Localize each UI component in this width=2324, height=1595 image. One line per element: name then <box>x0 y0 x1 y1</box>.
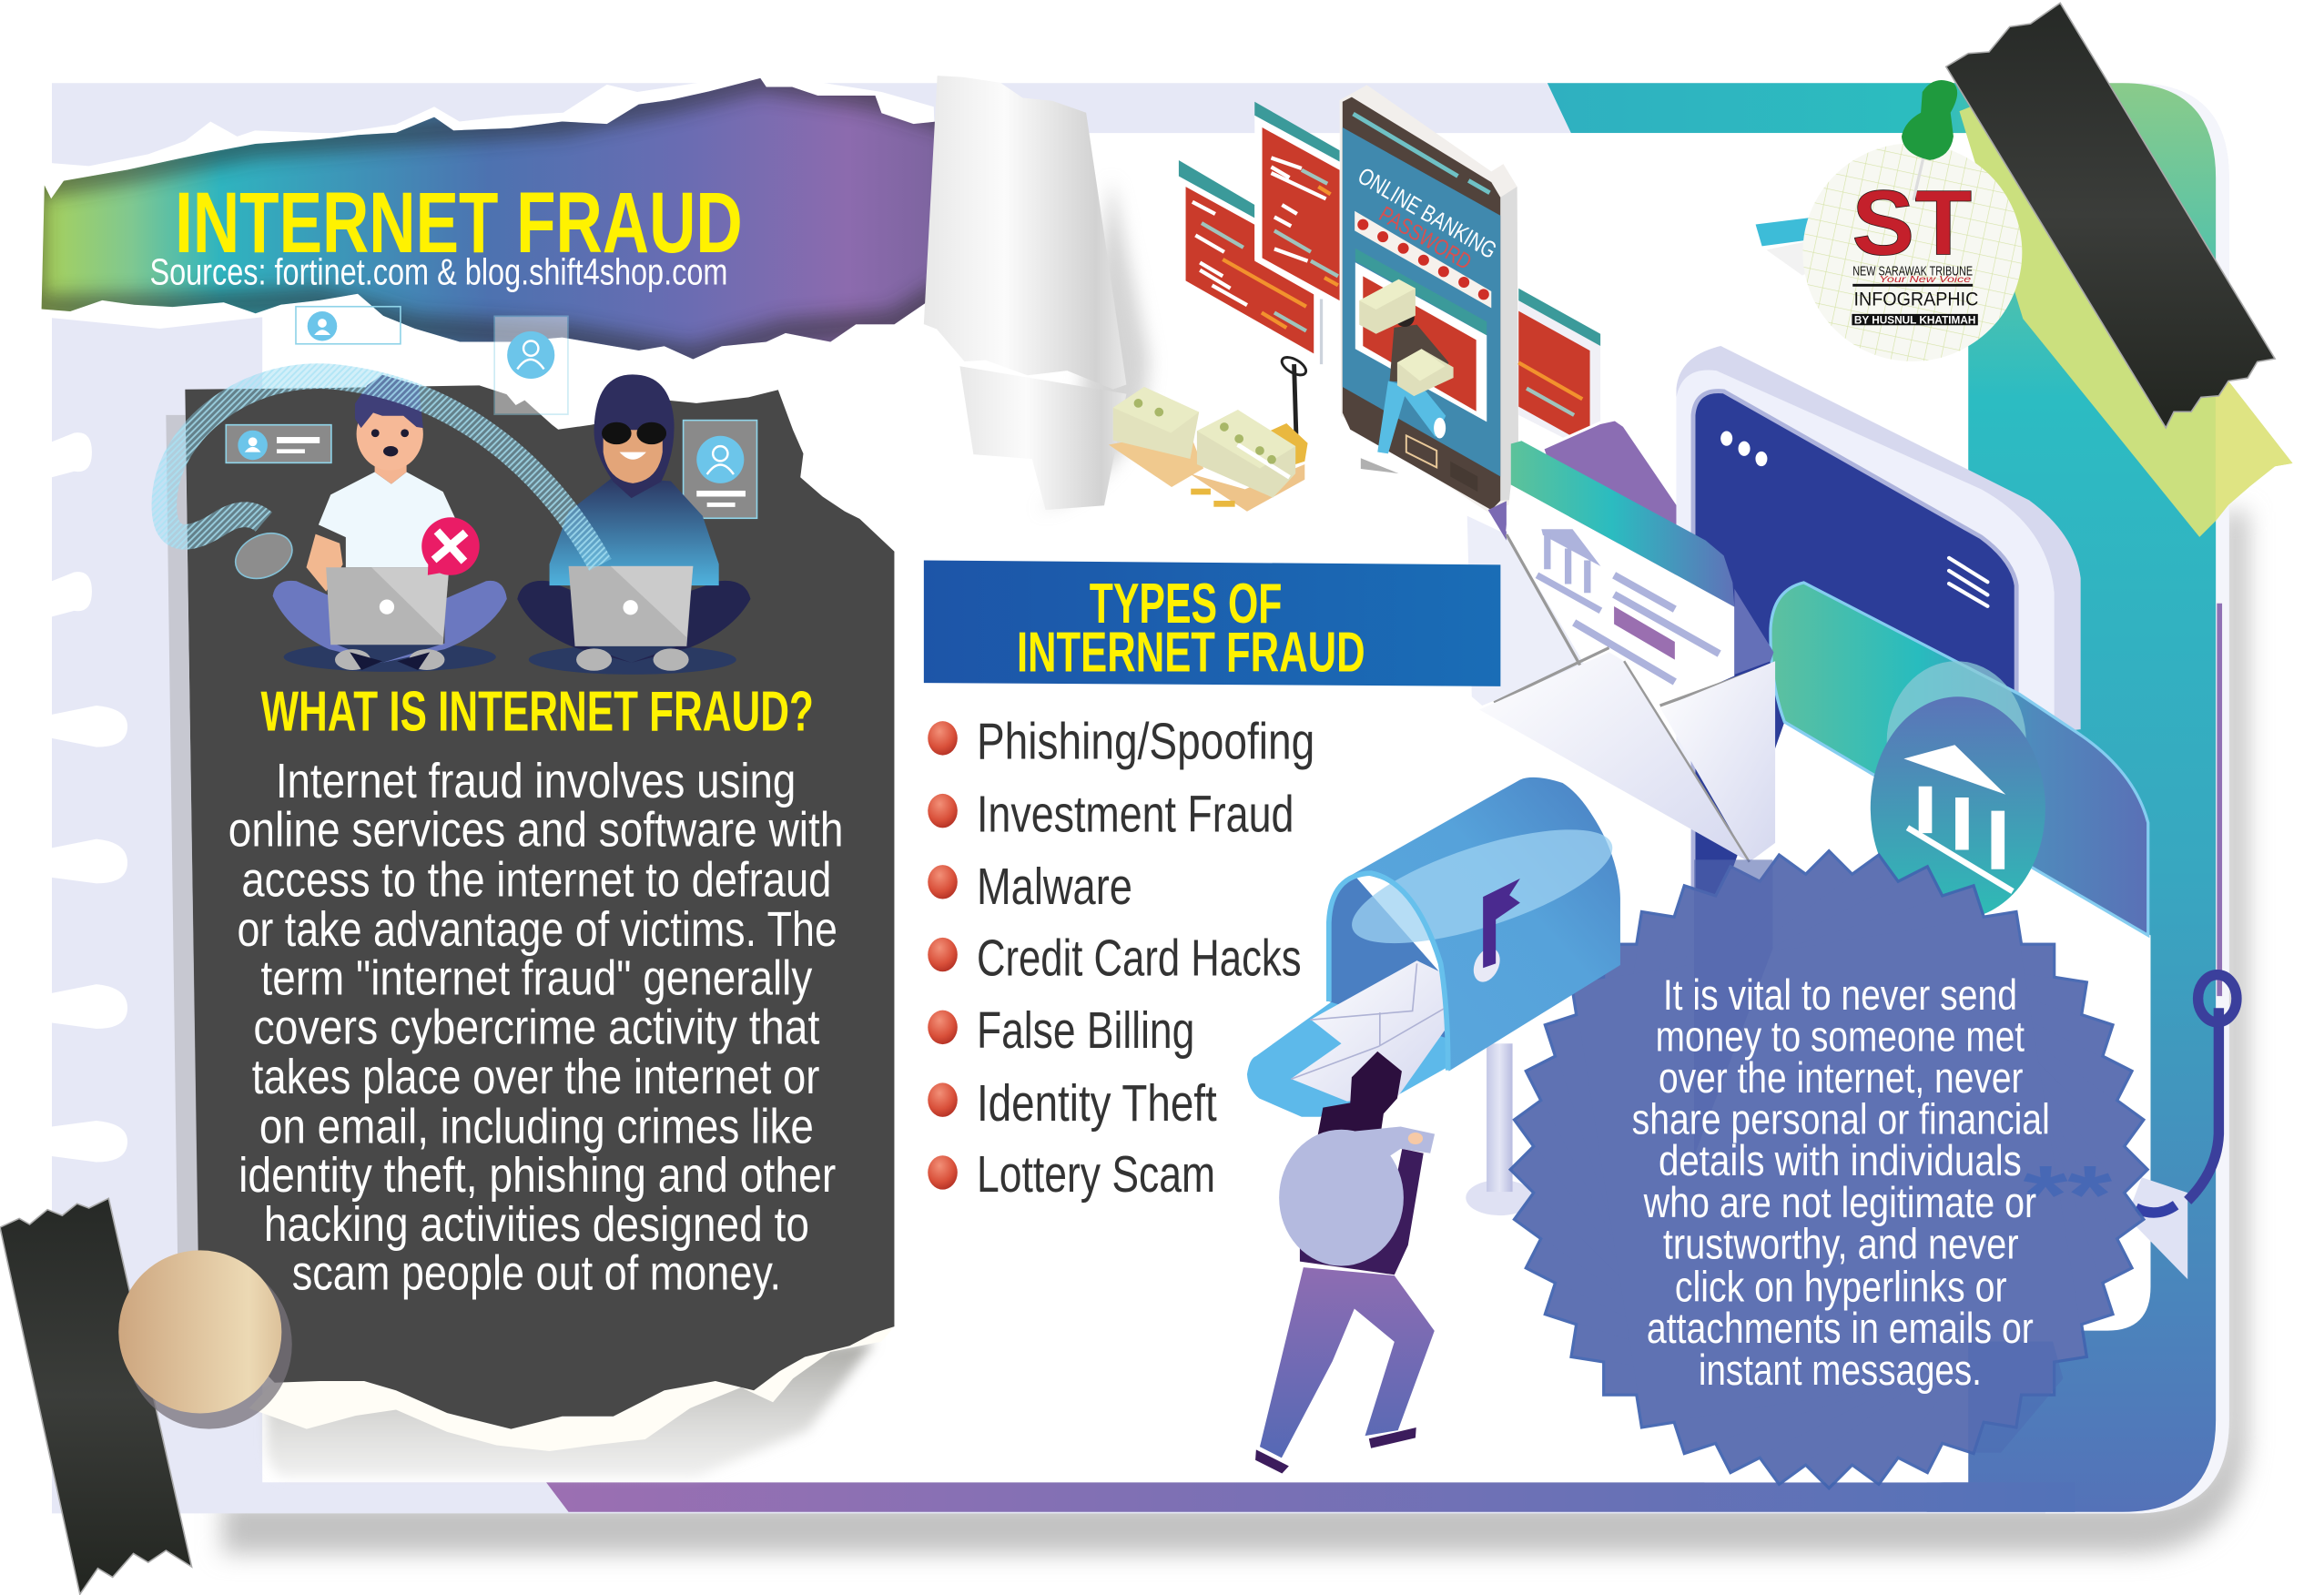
starburst callout: over the internet, never <box>1659 1054 2023 1102</box>
list item: Lottery Scam <box>977 1145 1215 1204</box>
logo sticker: Your New Voice <box>1879 275 1972 285</box>
icon: profile card tall <box>494 316 568 414</box>
big phone <box>1676 346 2081 949</box>
body paragraph: scam people out of money. <box>292 1246 781 1301</box>
fishing hook <box>2126 975 2237 1279</box>
torn banner white edge <box>51 74 939 378</box>
list item: False Billing <box>977 1001 1194 1060</box>
body paragraph: hacking activities designed to <box>264 1197 809 1252</box>
starburst callout: instant messages. <box>1699 1346 1982 1395</box>
body paragraph: identity theft, phishing and other <box>238 1148 836 1203</box>
body paragraph: online services and software with <box>228 803 843 858</box>
online banking phone <box>1340 85 1518 514</box>
list item <box>928 929 1302 987</box>
list: types of fraud <box>928 713 1314 1204</box>
icon: red x bubble <box>421 517 480 575</box>
red code window middle <box>1254 102 1340 364</box>
starburst callout <box>1508 848 2149 1490</box>
starburst callout: attachments in emails or <box>1647 1305 2034 1353</box>
online banking phone: PASSWORD <box>1375 202 1476 275</box>
body paragraph: on email, including crimes like <box>259 1099 814 1153</box>
green bank card <box>1771 583 2148 935</box>
list item: Identity Theft <box>977 1074 1217 1133</box>
heading: what is internet fraud: WHAT IS INTERNET FRAUD? <box>261 681 814 744</box>
red code window right <box>1518 289 1600 457</box>
list item <box>928 1074 1217 1133</box>
logo sticker: INFOGRAPHIC <box>1854 289 1978 310</box>
online banking phone: ONLINE BANKING <box>1354 162 1501 264</box>
list item <box>928 858 1132 916</box>
thief with sack <box>1255 1051 1435 1473</box>
starburst callout: money to someone met <box>1656 1012 2025 1061</box>
logo sticker <box>1756 143 2022 361</box>
rolled paper curl <box>924 76 1149 512</box>
money pallets and pallet jack <box>1109 354 1309 512</box>
logo sticker: BY HUSNUL KHATIMAH <box>1854 313 1975 326</box>
blue banner <box>924 560 1500 686</box>
purple line on right edge <box>2217 604 2221 996</box>
body paragraph: term "internet fraud" generally <box>261 951 812 1006</box>
left punch holes <box>52 432 127 1163</box>
folder purple tab <box>1543 420 1774 676</box>
list item: Investment Fraud <box>977 785 1294 843</box>
icon: profile card left <box>226 425 331 462</box>
top-right lime tape <box>1959 74 2292 537</box>
icon: green push pin <box>1902 80 1957 200</box>
starburst callout: who are not legitimate or <box>1643 1179 2036 1227</box>
body paragraph: takes place over the internet or <box>252 1050 819 1104</box>
page shadow under torn panel <box>267 1342 875 1477</box>
paper sheet shadow <box>222 512 2247 1553</box>
list item <box>928 1001 1194 1060</box>
icon: profile card top left <box>296 307 401 344</box>
panel left shadow <box>166 415 198 1275</box>
dark torn panel <box>185 385 894 1451</box>
list item: Phishing/Spoofing <box>977 713 1314 771</box>
list item <box>928 1145 1215 1204</box>
top-right black tape <box>1946 3 2275 428</box>
starburst callout: ** <box>2023 1148 2113 1241</box>
body paragraph: Internet fraud involves using <box>276 754 796 808</box>
mailbox post <box>1466 1043 1534 1215</box>
bottom-left black tape <box>0 1198 192 1594</box>
hacker illustration <box>517 374 751 675</box>
blue banner: INTERNET FRAUD <box>1017 622 1365 685</box>
list item: Malware <box>977 858 1132 916</box>
body paragraph: access to the internet to defraud <box>241 852 831 907</box>
icon: profile card right <box>684 421 757 518</box>
icon: bank badge <box>1871 661 2045 919</box>
starburst callout: details with individuals <box>1659 1137 2022 1185</box>
blue banner: TYPES OF <box>1090 573 1282 635</box>
white screen panel <box>1704 722 2151 1482</box>
envelope with bank letter <box>1467 441 1775 862</box>
logo sticker: ST <box>1852 173 1972 275</box>
body paragraph: covers cybercrime activity that <box>253 1000 819 1054</box>
tan sticker circle <box>118 1250 292 1429</box>
title: INTERNET FRAUD <box>175 176 743 271</box>
sources line: Sources: fortinet.com & blog.shift4shop.com <box>149 251 727 293</box>
gradient frame: top band <box>1548 83 2105 238</box>
red code window far left <box>1179 160 1314 353</box>
mailbox <box>1247 777 1624 1117</box>
gradient frame: right column <box>1927 83 2216 1512</box>
starburst callout: It is vital to never send <box>1663 971 2017 1020</box>
starburst callout: click on hyperlinks or <box>1675 1264 2007 1312</box>
victim illustration <box>273 375 507 672</box>
body paragraph <box>228 754 843 1301</box>
stolen data arc arm <box>164 376 600 587</box>
starburst callout: trustworthy, and never <box>1663 1220 2019 1268</box>
white inner page <box>262 133 1995 1482</box>
gradient frame: bottom band <box>546 1482 2075 1512</box>
torn banner <box>30 78 963 360</box>
body paragraph: or take advantage of victims. The <box>238 902 837 957</box>
starburst callout: share personal or financial <box>1632 1096 2050 1144</box>
logo sticker: NEW SARAWAK TRIBUNE <box>1852 265 1973 279</box>
list item: Credit Card Hacks <box>977 929 1302 987</box>
